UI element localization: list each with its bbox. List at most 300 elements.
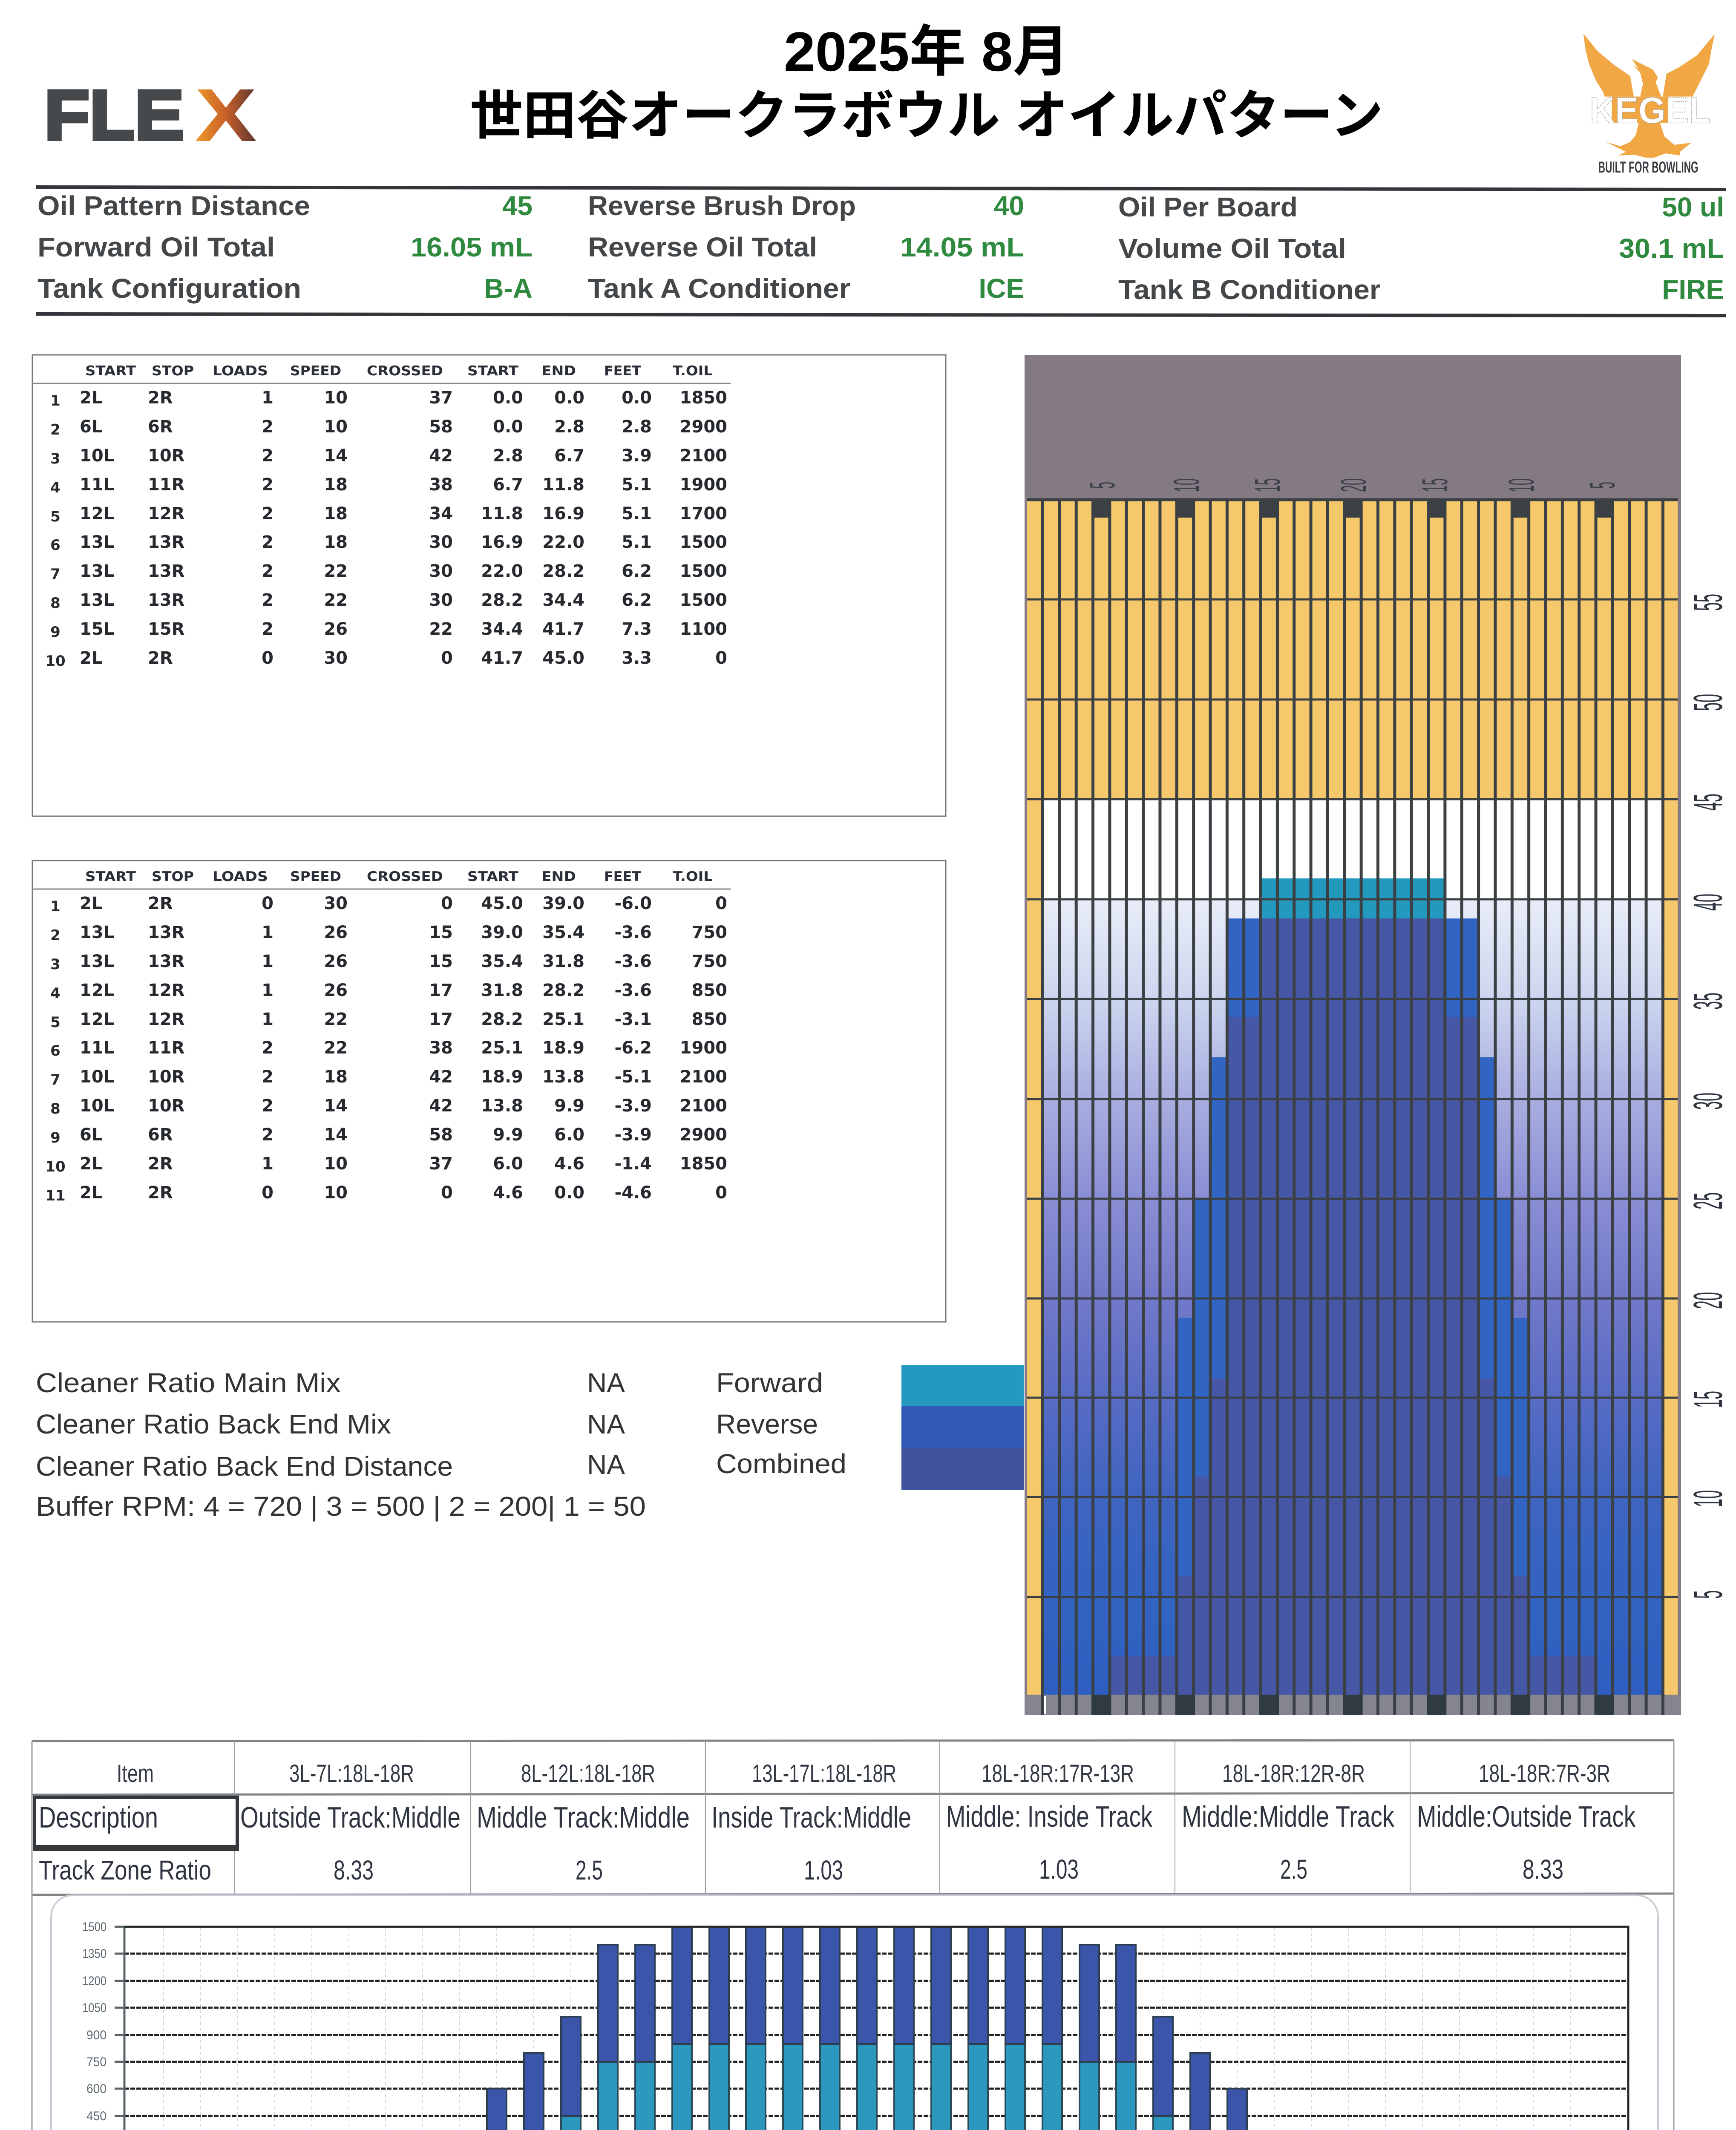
logo: FLEX: X xyxy=(195,74,257,157)
description row: Middle:Middle Track xyxy=(1182,1800,1395,1833)
forward table rows: 1 xyxy=(262,388,273,408)
legend: Combined xyxy=(716,1448,846,1479)
reverse table rows: 2100 xyxy=(680,1096,727,1116)
distance lines xyxy=(1027,599,1678,1597)
reverse table rows: 25.1 xyxy=(542,1010,584,1029)
reverse table rows: 58 xyxy=(429,1125,453,1145)
forward table rows: 10 xyxy=(45,653,66,670)
forward table rows: 2R xyxy=(148,648,173,668)
dashed gridlines xyxy=(124,1954,1628,2130)
ratio row: 8.33 xyxy=(334,1855,374,1885)
forward table rows: 3 xyxy=(50,450,60,467)
reverse table rows: 35.4 xyxy=(481,952,523,971)
forward table rows: 2100 xyxy=(680,446,727,466)
reverse table rows: 13R xyxy=(148,923,184,942)
table header row: Item xyxy=(117,1760,154,1787)
y-axis labels: 900 xyxy=(86,2028,107,2042)
reverse table rows: 13L xyxy=(80,923,114,942)
forward table rows: 2.8 xyxy=(493,446,523,466)
forward table rows: 0.0 xyxy=(493,417,523,437)
forward table rows: 10R xyxy=(148,446,184,466)
forward table header: LOADS xyxy=(213,363,268,379)
stats labels: Tank A Conditioner xyxy=(588,273,850,304)
distance labels: 40 xyxy=(1685,894,1731,911)
reverse table rows: 1 xyxy=(262,981,273,1000)
forward table rows: 22 xyxy=(429,619,453,639)
forward table rows: 10L xyxy=(80,446,114,466)
reverse table rows: 31.8 xyxy=(481,981,523,1000)
panel: oil per board bar chart xyxy=(51,1895,1658,2130)
text block: cleaner ratios and buffer RPM: NA xyxy=(587,1449,625,1480)
ratio row: 2.5 xyxy=(576,1855,603,1885)
reverse table rows: 0 xyxy=(441,1183,453,1203)
reverse table rows: 15 xyxy=(429,952,453,971)
reverse table rows: 10 xyxy=(324,1154,348,1174)
distance labels xyxy=(1685,594,1731,1599)
forward table header: START xyxy=(85,363,136,379)
ratio row: Track Zone Ratio xyxy=(39,1855,211,1885)
forward table rows: 16.9 xyxy=(481,532,523,552)
reverse table rows: -3.6 xyxy=(615,981,652,1000)
forward table rows: 1500 xyxy=(680,561,727,581)
reverse table rows: -3.9 xyxy=(615,1125,652,1145)
description row: Middle Track:Middle xyxy=(477,1801,690,1834)
reverse table rows: -6.2 xyxy=(615,1038,652,1058)
reverse table rows: 30 xyxy=(324,894,348,913)
reverse table rows: 42 xyxy=(429,1096,453,1116)
reverse table rows: 10 xyxy=(45,1158,66,1175)
reverse table header: START xyxy=(85,869,136,884)
reverse table rows: 750 xyxy=(692,952,727,971)
reverse table rows: 7 xyxy=(50,1071,60,1088)
forward table rows: 1850 xyxy=(680,388,727,408)
table header row xyxy=(117,1760,1610,1787)
stats values: 50 ul xyxy=(1662,192,1724,222)
forward table rows: 22.0 xyxy=(542,532,584,552)
forward table rows: 8 xyxy=(50,595,60,612)
forward table rows: 26 xyxy=(324,619,348,639)
forward table rows: 12L xyxy=(80,504,114,524)
y-axis labels: 1500 xyxy=(82,1920,107,1934)
table header row: 18L-18R:17R-13R xyxy=(982,1760,1134,1787)
forward table rows: 6L xyxy=(80,417,102,437)
title: 世田谷オークラボウル オイルパターン xyxy=(470,86,1383,145)
reverse table rows: 0 xyxy=(262,1183,273,1203)
distance labels: 35 xyxy=(1685,993,1731,1010)
forward table rows: 13R xyxy=(148,590,184,610)
forward table rows: 1500 xyxy=(680,590,727,610)
stats panel xyxy=(36,187,1726,316)
reverse table rows: 17 xyxy=(429,981,453,1000)
reverse table header: FEET xyxy=(604,869,641,884)
combined oil region xyxy=(1110,918,1596,1695)
ratio row: 8.33 xyxy=(1523,1854,1563,1885)
forward table rows: 5.1 xyxy=(622,475,652,495)
description row: Inside Track:Middle xyxy=(711,1801,911,1834)
forward table rows: 2 xyxy=(262,504,273,524)
reverse table rows: 6.0 xyxy=(493,1154,523,1174)
reverse table rows: 2L xyxy=(80,1154,102,1174)
chart: lane oil pattern graph: 10 xyxy=(1166,478,1206,492)
distance labels: 30 xyxy=(1685,1093,1731,1110)
stats values: 40 xyxy=(994,190,1024,221)
reverse table rows: 10L xyxy=(80,1067,114,1087)
description row: Outside Track:Middle xyxy=(240,1801,461,1834)
forward table rows: 45.0 xyxy=(542,648,584,668)
reverse table rows: 18 xyxy=(324,1067,348,1087)
reverse table rows: 12L xyxy=(80,981,114,1000)
logo: KEGEL phoenix xyxy=(1583,33,1715,176)
bottom arrows xyxy=(1091,1695,1614,1715)
reverse table rows: 42 xyxy=(429,1067,453,1087)
chart: lane oil pattern graph: 15 xyxy=(1415,478,1455,492)
forward table rows: 2 xyxy=(262,590,273,610)
reverse table rows: 1 xyxy=(262,1010,273,1029)
reverse table rows: 28.2 xyxy=(481,1010,523,1029)
forward table header: START xyxy=(467,363,518,379)
text block: cleaner ratios and buffer RPM xyxy=(36,1367,646,1522)
forward table rows: 30 xyxy=(324,648,348,668)
forward table rows: 6.7 xyxy=(554,446,584,466)
reverse table rows: 2R xyxy=(148,1183,173,1203)
forward table rows: 41.7 xyxy=(542,619,584,639)
reverse table rows: 1850 xyxy=(680,1154,727,1174)
forward table rows: 34.4 xyxy=(481,619,523,639)
board number labels xyxy=(1082,478,1622,492)
reverse table rows: 39.0 xyxy=(481,923,523,942)
stats values xyxy=(411,190,1724,305)
reverse table rows: 1900 xyxy=(680,1038,727,1058)
reverse table rows: 4.6 xyxy=(554,1154,584,1174)
forward table rows: 0.0 xyxy=(554,388,584,408)
forward table rows: 58 xyxy=(429,417,453,437)
reverse table rows xyxy=(45,894,727,1204)
reverse table rows: 12R xyxy=(148,981,184,1000)
chart: lane oil pattern graph: 55 xyxy=(1685,594,1731,611)
forward table rows: 22.0 xyxy=(481,561,523,581)
reverse table rows: 10L xyxy=(80,1096,114,1116)
reverse bars xyxy=(191,1927,1543,2130)
reverse table rows: 26 xyxy=(324,981,348,1000)
forward table rows: 0.0 xyxy=(493,388,523,408)
forward table rows: 3.3 xyxy=(622,648,652,668)
panel: forward oil table xyxy=(32,355,946,816)
board number labels: 5 xyxy=(1082,482,1122,489)
stats values: 16.05 mL xyxy=(411,232,533,262)
forward table rows: 0.0 xyxy=(622,388,652,408)
reverse table rows: 37 xyxy=(429,1154,453,1174)
forward table rows: 13R xyxy=(148,561,184,581)
reverse table rows: 13L xyxy=(80,952,114,971)
reverse table rows: 5 xyxy=(50,1014,60,1031)
reverse table rows: 2L xyxy=(80,1183,102,1203)
reverse table rows: 26 xyxy=(324,952,348,971)
stats labels: Reverse Brush Drop xyxy=(588,190,856,221)
text block: cleaner ratios and buffer RPM: NA xyxy=(587,1367,625,1398)
legend: Reverse xyxy=(716,1409,818,1439)
forward table rows: 0 xyxy=(262,648,273,668)
forward table rows: 2 xyxy=(262,475,273,495)
reverse table rows: 12L xyxy=(80,1010,114,1029)
forward table rows: 5.1 xyxy=(622,532,652,552)
forward table header: END xyxy=(541,363,576,379)
forward table rows: 22 xyxy=(324,561,348,581)
bottom strip xyxy=(1025,1695,1681,1715)
distance labels: 45 xyxy=(1685,794,1731,811)
forward table header: CROSSED xyxy=(367,363,443,379)
table header row: 8L-12L:18L-18R xyxy=(521,1760,655,1787)
reverse table rows: 14 xyxy=(324,1125,348,1145)
reverse table rows: 1 xyxy=(262,923,273,942)
foul line notch xyxy=(1044,1696,1046,1714)
reverse table rows: 6 xyxy=(50,1042,60,1059)
reverse table rows: 0.0 xyxy=(554,1183,584,1203)
reverse table rows: 2 xyxy=(262,1125,273,1145)
reverse table rows: 0 xyxy=(441,894,453,913)
forward table rows: 28.2 xyxy=(542,561,584,581)
reverse table rows: 13.8 xyxy=(481,1096,523,1116)
forward table rows: 1100 xyxy=(680,619,727,639)
stats labels xyxy=(37,190,1381,305)
legend: Forward xyxy=(716,1367,823,1398)
forward table rows: 13L xyxy=(80,561,114,581)
reverse table rows: -1.4 xyxy=(615,1154,652,1174)
reverse table rows: 2R xyxy=(148,1154,173,1174)
forward table rows: 0 xyxy=(715,648,727,668)
top arrows xyxy=(1091,500,1614,518)
reverse table rows: 850 xyxy=(692,981,727,1000)
reverse table rows: 11R xyxy=(148,1038,184,1058)
forward table rows: 10 xyxy=(324,417,348,437)
forward table header: FEET xyxy=(604,363,641,379)
stats labels: Reverse Oil Total xyxy=(588,232,817,262)
forward table rows: 30 xyxy=(429,532,453,552)
reverse table rows: 15 xyxy=(429,923,453,942)
forward table rows: 1700 xyxy=(680,504,727,524)
reverse table rows: 14 xyxy=(324,1096,348,1116)
description row: Middle: Inside Track xyxy=(946,1800,1153,1833)
reverse table rows: -3.9 xyxy=(615,1096,652,1116)
forward table rows: 13L xyxy=(80,532,114,552)
stats labels: Forward Oil Total xyxy=(37,232,275,262)
track zone ratio table xyxy=(32,1740,1674,2130)
stats values: 30.1 mL xyxy=(1619,233,1724,264)
forward table rows: 7.3 xyxy=(622,619,652,639)
forward table rows: 13R xyxy=(148,532,184,552)
forward table rows: 38 xyxy=(429,475,453,495)
table header row: 13L-17L:18L-18R xyxy=(752,1760,896,1787)
reverse table header: LOADS xyxy=(213,869,268,884)
ratio row xyxy=(39,1854,1563,1885)
y-axis labels: 450 xyxy=(86,2109,107,2123)
description row: Middle:Outside Track xyxy=(1417,1800,1636,1833)
logo: FLEX xyxy=(44,74,257,157)
reverse table rows: 4.6 xyxy=(493,1183,523,1203)
text block: cleaner ratios and buffer RPM: NA xyxy=(587,1409,625,1439)
distance labels: 50 xyxy=(1685,694,1731,711)
forward table rows: 28.2 xyxy=(481,590,523,610)
text block: cleaner ratios and buffer RPM: Cleaner Ratio Main Mix xyxy=(36,1367,341,1398)
vertical guide lines xyxy=(164,1927,1570,2130)
reverse table rows: -6.0 xyxy=(615,894,652,913)
reverse table header: SPEED xyxy=(290,869,341,884)
chart: lane oil pattern graph: 10 xyxy=(1501,478,1541,492)
stats labels: Tank Configuration xyxy=(37,273,301,304)
forward table rows: 18 xyxy=(324,475,348,495)
reverse table rows: 31.8 xyxy=(542,952,584,971)
reverse table rows: 0 xyxy=(715,1183,727,1203)
reverse table rows: 28.2 xyxy=(542,981,584,1000)
reverse table rows: 26 xyxy=(324,923,348,942)
reverse oil regions xyxy=(1177,918,1529,1576)
forward table rows: 2 xyxy=(262,532,273,552)
reverse table rows: 13R xyxy=(148,952,184,971)
reverse table rows: 22 xyxy=(324,1038,348,1058)
text block: cleaner ratios and buffer RPM: Buffer RPM: 4 = 720 | 3 = 500 | 2 = 200| 1 = 50 xyxy=(36,1491,646,1522)
description row: Description xyxy=(39,1801,158,1834)
forward table rows: 41.7 xyxy=(481,648,523,668)
distance labels: 25 xyxy=(1685,1192,1731,1209)
table header row: 18L-18R:12R-8R xyxy=(1222,1760,1365,1787)
reverse table rows: 750 xyxy=(692,923,727,942)
reverse table rows: 9.9 xyxy=(493,1125,523,1145)
board number labels: 5 xyxy=(1582,482,1622,489)
reverse table rows: 4 xyxy=(50,985,60,1002)
forward table rows: 2 xyxy=(50,421,60,438)
selected description cell xyxy=(33,1797,239,1851)
axes xyxy=(115,1927,124,2130)
board lines xyxy=(1041,500,1665,1715)
logo: FLEX: FLE xyxy=(44,76,184,154)
forward bars xyxy=(191,2044,1543,2130)
panel: reverse oil table xyxy=(32,861,946,1322)
reverse table rows: 18.9 xyxy=(542,1038,584,1058)
reverse table rows: 1 xyxy=(50,898,60,915)
forward table rows: 7 xyxy=(50,566,60,583)
reverse table header: STOP xyxy=(152,869,194,884)
forward table rows: 11L xyxy=(80,475,114,495)
forward table rows: 34.4 xyxy=(542,590,584,610)
forward table rows: 3.9 xyxy=(622,446,652,466)
forward table rows: 4 xyxy=(50,479,60,496)
reverse table rows: 10 xyxy=(324,1183,348,1203)
distance labels: 10 xyxy=(1685,1490,1731,1507)
reverse table rows: 3 xyxy=(50,956,60,973)
reverse table rows: 2R xyxy=(148,894,173,913)
reverse table rows: -3.1 xyxy=(615,1010,652,1029)
text block: cleaner ratios and buffer RPM: Cleaner Ratio Back End Mix xyxy=(36,1409,391,1439)
y-axis labels xyxy=(82,1920,107,2130)
forward table rows: 6.7 xyxy=(493,475,523,495)
ratio row: 1.03 xyxy=(1039,1854,1079,1885)
distance labels: 20 xyxy=(1685,1292,1731,1309)
forward table rows: 15R xyxy=(148,619,184,639)
distance labels: 15 xyxy=(1685,1391,1731,1408)
table header row: 3L-7L:18L-18R xyxy=(289,1760,414,1787)
chart: lane oil pattern graph xyxy=(1025,355,1731,1715)
forward table rows: 2R xyxy=(148,388,173,408)
forward table rows: 5 xyxy=(50,508,60,525)
y-axis labels: 600 xyxy=(86,2082,107,2096)
forward table rows: 14 xyxy=(324,446,348,466)
distance labels: 5 xyxy=(1685,1590,1731,1599)
reverse table rows: 6R xyxy=(148,1125,173,1145)
forward table rows: 18 xyxy=(324,532,348,552)
reverse table rows: 2 xyxy=(50,927,60,944)
reverse table rows: 11 xyxy=(45,1187,66,1204)
forward table rows: 6 xyxy=(50,537,60,554)
reverse table rows: 0 xyxy=(715,894,727,913)
reverse table header xyxy=(85,869,713,884)
reverse table rows: 9.9 xyxy=(554,1096,584,1116)
stats labels: Volume Oil Total xyxy=(1118,233,1346,264)
forward table header xyxy=(85,363,713,379)
forward table rows: 30 xyxy=(429,561,453,581)
reverse table header: START xyxy=(467,869,518,884)
forward table rows: 1500 xyxy=(680,532,727,552)
reverse table rows: 8 xyxy=(50,1100,60,1117)
reverse table rows: 6.0 xyxy=(554,1125,584,1145)
reverse table rows: -4.6 xyxy=(615,1183,652,1203)
stats labels: Oil Pattern Distance xyxy=(37,190,310,221)
forward table rows: 30 xyxy=(429,590,453,610)
reverse table rows: 6L xyxy=(80,1125,102,1145)
reverse table rows: 2 xyxy=(262,1067,273,1087)
reverse table rows: 2900 xyxy=(680,1125,727,1145)
forward table rows: 2 xyxy=(262,446,273,466)
forward table rows: 2.8 xyxy=(554,417,584,437)
forward table rows: 34 xyxy=(429,504,453,524)
title: 2025年 8月 xyxy=(784,20,1069,83)
reverse table header: CROSSED xyxy=(367,869,443,884)
reverse table rows: 2100 xyxy=(680,1067,727,1087)
reverse table header: T.OIL xyxy=(673,869,713,884)
forward table rows: 22 xyxy=(324,590,348,610)
forward table rows: 42 xyxy=(429,446,453,466)
forward table rows: 10 xyxy=(324,388,348,408)
reverse table rows: 11L xyxy=(80,1038,114,1058)
forward table rows: 11.8 xyxy=(542,475,584,495)
reverse table rows: 38 xyxy=(429,1038,453,1058)
y-axis labels: 1350 xyxy=(82,1947,107,1961)
reverse table rows: 1 xyxy=(262,1154,273,1174)
forward table rows: 2 xyxy=(262,619,273,639)
stats values: 14.05 mL xyxy=(900,232,1024,262)
ratio row: 1.03 xyxy=(804,1855,843,1885)
forward table rows: 18 xyxy=(324,504,348,524)
stats values: ICE xyxy=(979,273,1024,304)
forward table rows: 16.9 xyxy=(542,504,584,524)
forward table rows: 6R xyxy=(148,417,173,437)
reverse table rows: 1 xyxy=(262,952,273,971)
forward table rows: 1900 xyxy=(680,475,727,495)
forward table rows: 11R xyxy=(148,475,184,495)
reverse table rows: -3.6 xyxy=(615,952,652,971)
legend xyxy=(716,1365,1024,1490)
reverse table rows: 10R xyxy=(148,1067,184,1087)
reverse table rows: 18.9 xyxy=(481,1067,523,1087)
title xyxy=(470,20,1383,145)
reverse table rows: -3.6 xyxy=(615,923,652,942)
reverse table rows: 17 xyxy=(429,1010,453,1029)
forward table rows: 0 xyxy=(441,648,453,668)
reverse table rows: 850 xyxy=(692,1010,727,1029)
forward table header: T.OIL xyxy=(673,363,713,379)
y-axis labels: 1200 xyxy=(82,1974,107,1988)
forward table rows: 5.1 xyxy=(622,504,652,524)
reverse table rows: 35.4 xyxy=(542,923,584,942)
stats labels: Tank B Conditioner xyxy=(1118,274,1381,305)
